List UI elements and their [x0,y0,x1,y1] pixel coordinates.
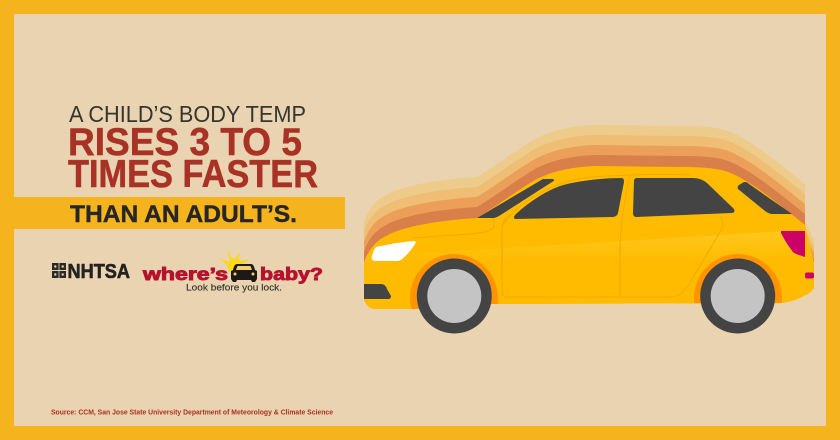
taillight [781,231,805,257]
banner text: THAN AN ADULT’S. [70,201,297,228]
rear wheel [700,258,775,334]
icon: car front [231,264,257,282]
windshield [477,179,554,218]
logo: NHTSA [52,261,130,283]
car [360,160,820,342]
yellow banner [14,197,345,229]
rear quarter window [738,182,792,214]
front door window [514,178,624,219]
tagline: Look before you lock. [186,282,282,294]
headline line 2: RISES 3 TO 5 [68,121,302,164]
icon: sun [219,250,250,274]
rear reflector [805,272,814,278]
headlight [372,241,416,261]
front wheel [417,258,492,334]
source note: Source: CCM, San Jose State University Department of Meteorology & Climate Science [51,410,333,416]
rear wheel arch [694,254,782,304]
headline [68,101,318,196]
body panel lines [413,174,723,297]
front wheel arch [410,254,498,309]
rear door window [633,178,734,217]
icon: NHTSA emblem [52,263,66,278]
where's wordmark: where’s [142,264,228,284]
heat waves behind car [364,125,814,263]
body highlight band [360,231,820,310]
logo: where's baby [142,250,323,294]
front bumper vent [364,284,391,299]
car body [364,166,814,309]
headline line 3: TIMES FASTER [68,153,318,196]
headline line 1: A CHILD’S BODY TEMP [69,101,306,127]
baby wordmark: baby? [260,264,323,284]
NHTSA wordmark: NHTSA [68,261,130,283]
